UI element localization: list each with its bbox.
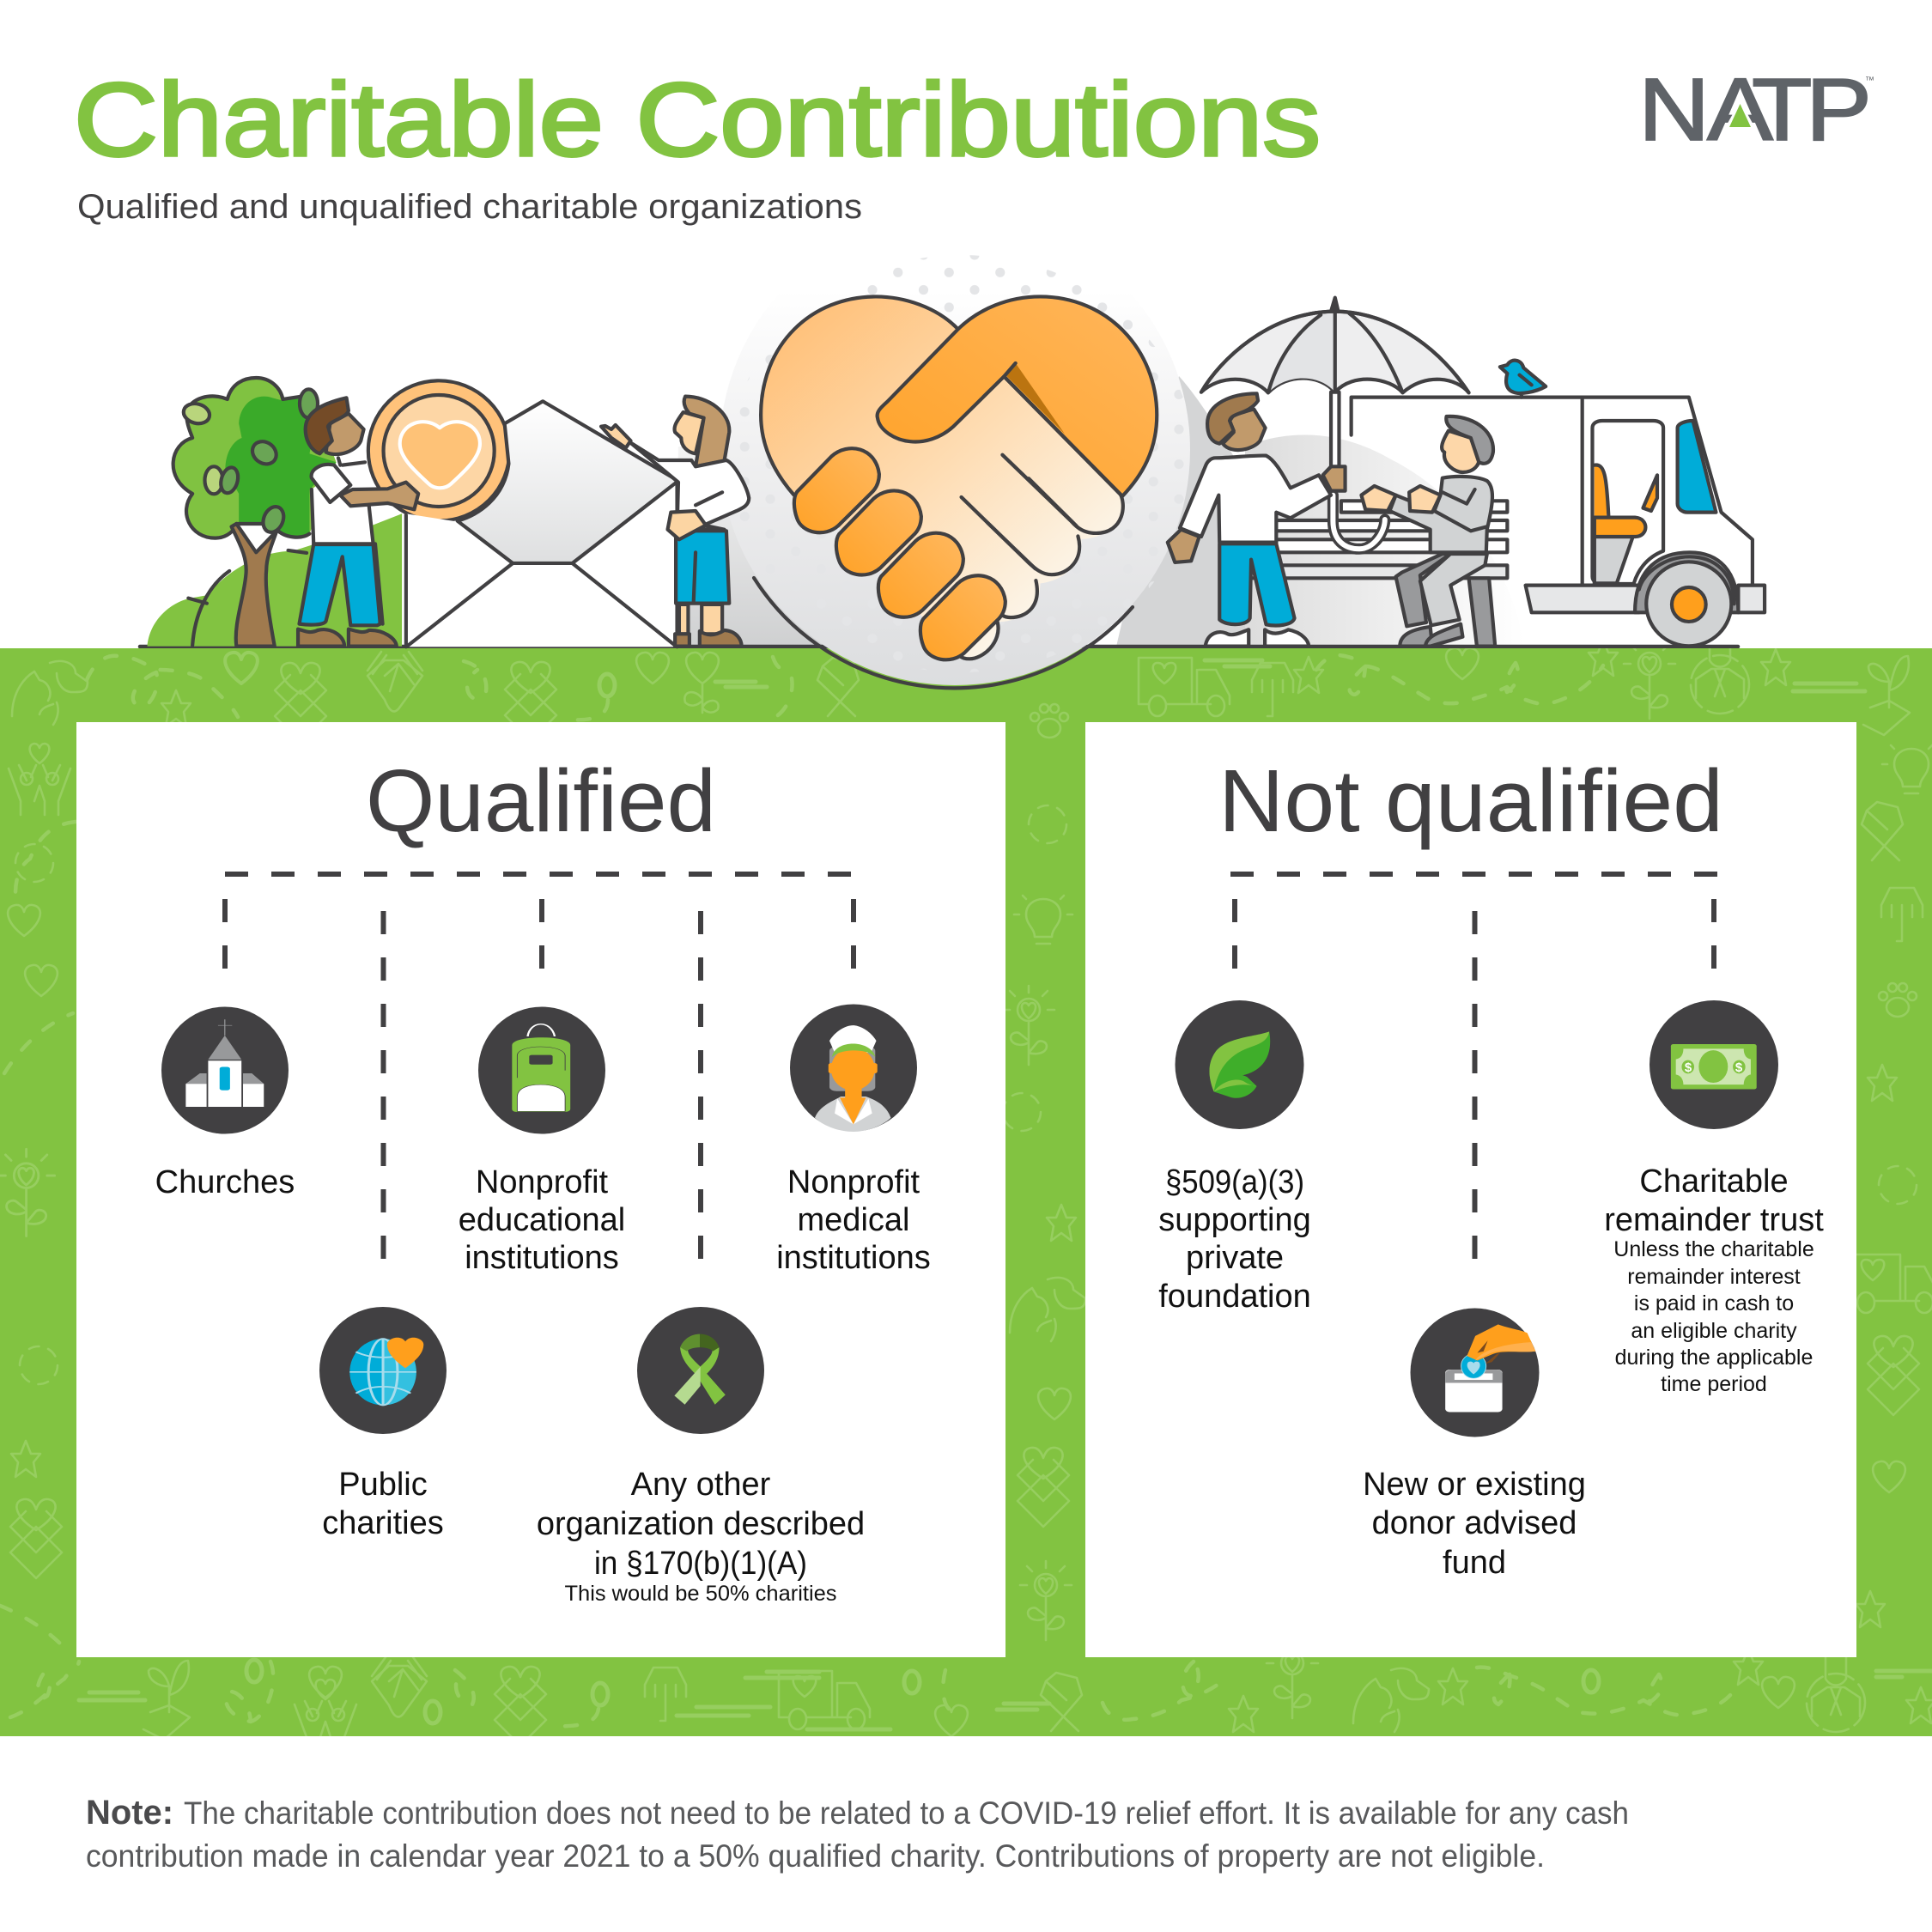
woman [601, 397, 749, 647]
icon: donation box [1410, 1309, 1539, 1437]
gray backdrop shapes behind illustration [675, 376, 1524, 647]
label: Any other organization: organization described [537, 1506, 865, 1542]
truck [1352, 398, 1765, 646]
label: Churches: Churches [155, 1164, 295, 1200]
middle strip [1030, 704, 1068, 738]
dashed connectors [1230, 874, 1718, 1259]
label: Charitable remainder trust: is paid in cash to [1634, 1291, 1794, 1315]
label: 509(a)(3) supporting private foundation: foundation [1158, 1279, 1311, 1315]
label: Nonprofit educational institutions: Nonprofit [476, 1164, 609, 1200]
label: Charitable remainder trust: time period [1661, 1372, 1767, 1396]
illustration: tree, bushes, man with coin, envelope, woman [148, 378, 749, 647]
label: Charitable remainder trust: Unless the charitable [1613, 1237, 1814, 1261]
bushes [148, 513, 402, 647]
label: Charitable remainder trust: Charitable [1639, 1163, 1789, 1200]
icon: globe with heart [319, 1307, 447, 1434]
label: Charitable remainder trust: remainder trust [1604, 1202, 1824, 1238]
title: Charitable Contributions [74, 61, 1321, 178]
orange hand and thumb [878, 296, 1157, 496]
icon: leaf [1175, 1000, 1303, 1129]
illustration: handshake heart [761, 296, 1157, 659]
bird [1500, 361, 1546, 398]
green patterned background band [0, 638, 1932, 1751]
panel: Qualified [76, 722, 1005, 1657]
note [86, 1794, 1629, 1874]
label: Charitable remainder trust [1604, 1163, 1824, 1396]
label: New or existing donor advised fund: donor advised [1372, 1505, 1577, 1541]
seated man [1361, 416, 1493, 647]
top strip [12, 661, 88, 725]
label: Any other organization: in §170(b)(1)(A) [594, 1546, 807, 1582]
label: Charitable remainder trust: remainder interest [1627, 1265, 1801, 1289]
band doodles [0, 638, 1932, 1751]
heading: Qualified: Qualified [366, 751, 716, 850]
logo: NATP: ™ [1865, 76, 1874, 86]
icon: backpack [478, 1006, 605, 1133]
light hand [761, 296, 1123, 659]
umbrella [1201, 298, 1469, 549]
icon: nurse [790, 1005, 917, 1132]
label: Nonprofit educational institutions: educational [459, 1202, 625, 1238]
icon: banknote [1649, 1000, 1778, 1129]
ground line [140, 645, 1738, 648]
note: The charitable contribution does not need to be related to a COVID-19 relief effort. It is available for any cash [184, 1795, 1629, 1831]
label: Nonprofit medical institutions: Nonprofit [787, 1164, 920, 1200]
bottom strip [10, 1662, 79, 1717]
icon: banknote: $ [1735, 1060, 1743, 1075]
label: Nonprofit educational institutions: institutions [465, 1240, 619, 1276]
icon: church [161, 1006, 289, 1133]
label: Charitable remainder trust: during the applicable [1615, 1346, 1813, 1370]
label: New or existing donor advised fund: fund [1443, 1545, 1506, 1581]
label: New or existing donor advised fund: New or existing [1363, 1467, 1586, 1503]
note: Note: [86, 1794, 173, 1832]
standing man [1168, 393, 1346, 647]
illustration: umbrella, bench, people, truck [1168, 298, 1765, 647]
tree [173, 378, 337, 647]
label: 509(a)(3) supporting private foundation [1158, 1164, 1311, 1315]
label: Any other organization: Any other [631, 1467, 771, 1503]
label: Any other organization [537, 1467, 865, 1606]
logo: NATP: NATP [1638, 61, 1872, 160]
bench [1248, 501, 1507, 647]
panel: Not qualified [1085, 722, 1856, 1657]
label: 509(a)(3) supporting private foundation: supporting [1158, 1202, 1311, 1238]
label: Public charities: charities [322, 1505, 444, 1541]
subtitle: Qualified and unqualified charitable organizations [77, 188, 862, 226]
left strip [9, 744, 70, 815]
label: Nonprofit medical institutions: medical [798, 1202, 909, 1238]
orange fingers [794, 448, 879, 532]
label: 509(a)(3) supporting private foundation: §509(a)(3) [1165, 1164, 1304, 1200]
heading: Not qualified: Not qualified [1218, 751, 1723, 850]
note: contribution made in calendar year 2021 to a 50% qualified charity. Contributions of property are not eligible. [86, 1838, 1545, 1874]
panel: central circle backdrop with dots [720, 215, 1195, 688]
label: 509(a)(3) supporting private foundation: private [1186, 1240, 1284, 1276]
man with coin [298, 380, 509, 647]
envelope [406, 401, 678, 647]
right strip [1882, 745, 1932, 793]
label: Public charities: Public [338, 1467, 428, 1503]
icon: banknote: $ [1685, 1060, 1692, 1075]
coin [368, 380, 509, 521]
label: Nonprofit medical institutions: institutions [776, 1240, 931, 1276]
label: Charitable remainder trust: an eligible charity [1631, 1319, 1797, 1343]
icon: awareness ribbon [637, 1307, 764, 1434]
label: Any other organization: This would be 50% charities [565, 1582, 836, 1606]
dashed connectors [225, 874, 854, 1259]
